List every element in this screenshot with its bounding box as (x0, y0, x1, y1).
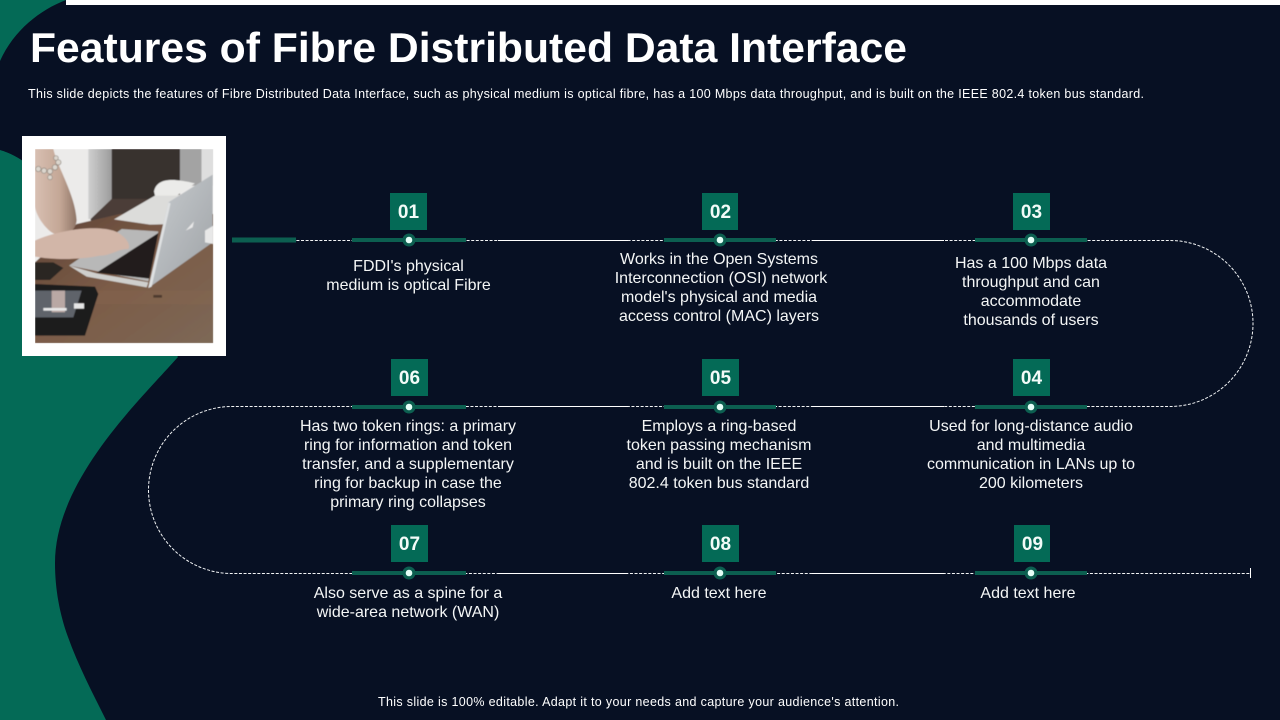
step 05: and is built on the IEEE (636, 456, 802, 473)
step 06: transfer, and a supplementary (302, 456, 514, 473)
timeline path (149, 240, 1253, 578)
step 03: throughput and can (962, 274, 1100, 291)
step 06: 06 (399, 368, 420, 389)
step 02: access control (MAC) layers (619, 308, 819, 325)
step 06: Has two token rings: a primary (300, 418, 516, 435)
step 01: medium is optical Fibre (326, 277, 491, 294)
photo: laptop on a desk (22, 136, 226, 356)
step 08 (664, 525, 776, 602)
step 06: ring for information and token (304, 437, 512, 454)
step 04: 200 kilometers (979, 475, 1083, 492)
step 04: Used for long-distance audio (929, 418, 1133, 435)
step 01: 01 (398, 202, 419, 223)
step 07 (314, 525, 502, 621)
step 07: wide-area network (WAN) (316, 604, 499, 621)
step 02: Interconnection (OSI) network (615, 270, 828, 287)
step 03: Has a 100 Mbps data (955, 255, 1107, 272)
step 04: 04 (1021, 368, 1042, 389)
timeline start bar (232, 238, 296, 242)
step 05: token passing mechanism (627, 437, 811, 454)
step 03: accommodate (981, 293, 1081, 310)
step 09: Add text here (980, 585, 1076, 602)
step 05 (627, 359, 811, 492)
step 05: 802.4 token bus standard (629, 475, 809, 492)
step 04: and multimedia (977, 437, 1085, 454)
step 01: FDDI's physical (353, 258, 464, 275)
step 06: primary ring collapses (330, 494, 486, 511)
title: Features of Fibre Distributed Data Interface (30, 24, 907, 71)
step 03 (955, 193, 1107, 329)
step 04: communication in LANs up to (927, 456, 1135, 473)
step 05: 05 (710, 368, 731, 389)
green wave shape left (0, 150, 178, 720)
step 06: ring for backup in case the (314, 475, 502, 492)
step 03: thousands of users (963, 312, 1099, 329)
step 03: 03 (1021, 202, 1042, 223)
step 05: Employs a ring-based (642, 418, 796, 435)
step 08: 08 (710, 534, 731, 555)
step 08: Add text here (671, 585, 767, 602)
step 02: Works in the Open Systems (620, 251, 818, 268)
step 02 (615, 193, 828, 325)
step 07: Also serve as a spine for a (314, 585, 502, 602)
step 09 (975, 525, 1087, 602)
top white strip (66, 0, 1280, 5)
step 02: 02 (710, 202, 731, 223)
step 04 (927, 359, 1135, 492)
subtitle: This slide depicts the features of Fibre Distributed Data Interface, such as physical medium is optical fibre, has a 100 Mbps data throughput, and is built on the IEEE 802.4 token bus standard. (28, 87, 1144, 101)
step 06 (300, 359, 516, 511)
step 07: 07 (399, 534, 420, 555)
green corner shape top-left (0, 0, 66, 61)
step 02: model's physical and media (621, 289, 817, 306)
step 01 (326, 193, 491, 294)
step 09: 09 (1022, 534, 1043, 555)
footer note: This slide is 100% editable. Adapt it to your needs and capture your audience's attention. (378, 695, 899, 709)
